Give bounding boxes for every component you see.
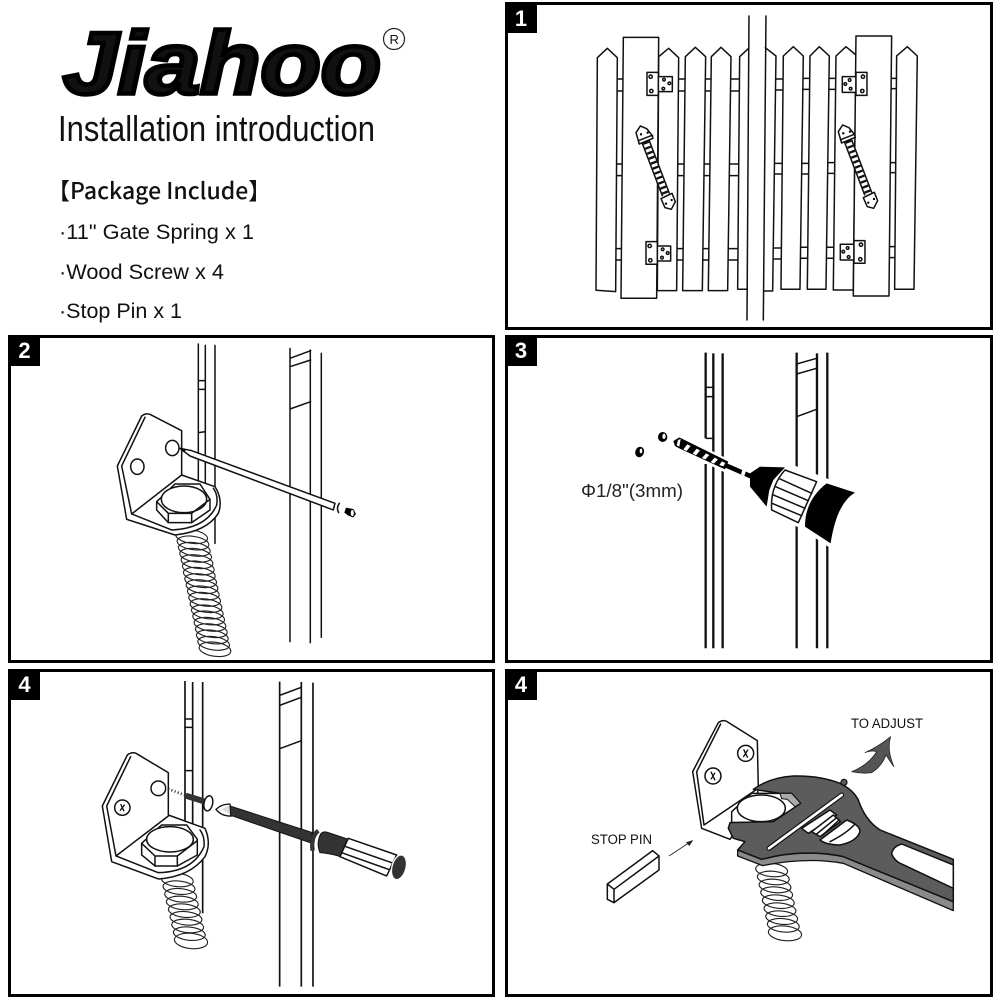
list item: gate spring: ·11" Gate Spring x 1 bbox=[59, 221, 254, 244]
illustration: bracket and pencil on gate bbox=[117, 344, 356, 658]
badge: step 3 bbox=[505, 335, 537, 366]
heading: installation introduction: Installation introduction bbox=[58, 108, 375, 149]
label: stop pin: STOP PIN bbox=[591, 832, 652, 847]
badge: step 2 bbox=[9, 335, 40, 366]
panel: step 4 fix screws bbox=[9, 669, 494, 996]
badge: step 1 bbox=[505, 3, 537, 33]
hinge: left top bbox=[647, 72, 672, 95]
stop pin bbox=[607, 851, 659, 903]
header: logo and package list bbox=[47, 14, 404, 323]
badge: step 4 second bbox=[505, 669, 537, 700]
drill bbox=[670, 435, 860, 548]
spring coil bbox=[175, 528, 232, 658]
spring: right gate bbox=[838, 125, 878, 208]
bolt bbox=[732, 793, 801, 823]
illustration: screwdriver and bracket bbox=[102, 681, 409, 987]
illustration: drill on gate bbox=[634, 353, 860, 648]
wrench bbox=[728, 776, 953, 911]
label: drill bit diameter: Φ1/8"(3mm) bbox=[581, 480, 683, 501]
badge: step 2: 2 bbox=[18, 338, 31, 363]
arrow: stop pin direction bbox=[669, 840, 693, 856]
illustration: double gate with springs bbox=[596, 16, 917, 320]
panel: step 4 adjust with wrench bbox=[505, 669, 992, 996]
hinge: right bottom bbox=[840, 241, 865, 263]
badge: step 1: 1 bbox=[515, 6, 527, 31]
badge: step 4: 4 bbox=[18, 672, 31, 697]
pencil bbox=[180, 448, 356, 517]
label: to adjust: TO ADJUST bbox=[851, 716, 923, 731]
list item: wood screw: ·Wood Screw x 4 bbox=[59, 261, 224, 284]
registered mark: R bbox=[390, 32, 399, 47]
spring coil bbox=[161, 872, 208, 950]
spring coil bbox=[755, 862, 802, 942]
registered mark bbox=[384, 28, 404, 50]
list item: stop pin: ·Stop Pin x 1 bbox=[59, 300, 182, 323]
hinge: left bottom bbox=[646, 242, 671, 264]
spring: left gate bbox=[636, 126, 675, 209]
bracket with bolt bbox=[117, 414, 220, 535]
badge: step 4 bbox=[9, 669, 40, 700]
badge: step 4 second: 4 bbox=[515, 672, 528, 697]
logo: Jiahoo: Jiahoo bbox=[63, 14, 381, 112]
heading: package include: 【Package Include】 bbox=[47, 172, 271, 206]
illustration: wrench, bracket and stop pin bbox=[607, 721, 953, 942]
arrow: adjust direction bbox=[852, 737, 894, 773]
drilled holes bbox=[634, 432, 667, 458]
bracket bbox=[693, 721, 758, 839]
wood screw bbox=[168, 789, 214, 812]
panel: step 1 gate overview bbox=[505, 3, 992, 328]
badge: step 3: 3 bbox=[515, 338, 527, 363]
panel: step 2 mark the holes bbox=[9, 335, 494, 662]
panel: step 3 drill holes bbox=[505, 335, 992, 662]
hinge: right top bbox=[842, 72, 867, 95]
screwdriver bbox=[216, 804, 409, 881]
bracket with bolt bbox=[102, 753, 208, 879]
